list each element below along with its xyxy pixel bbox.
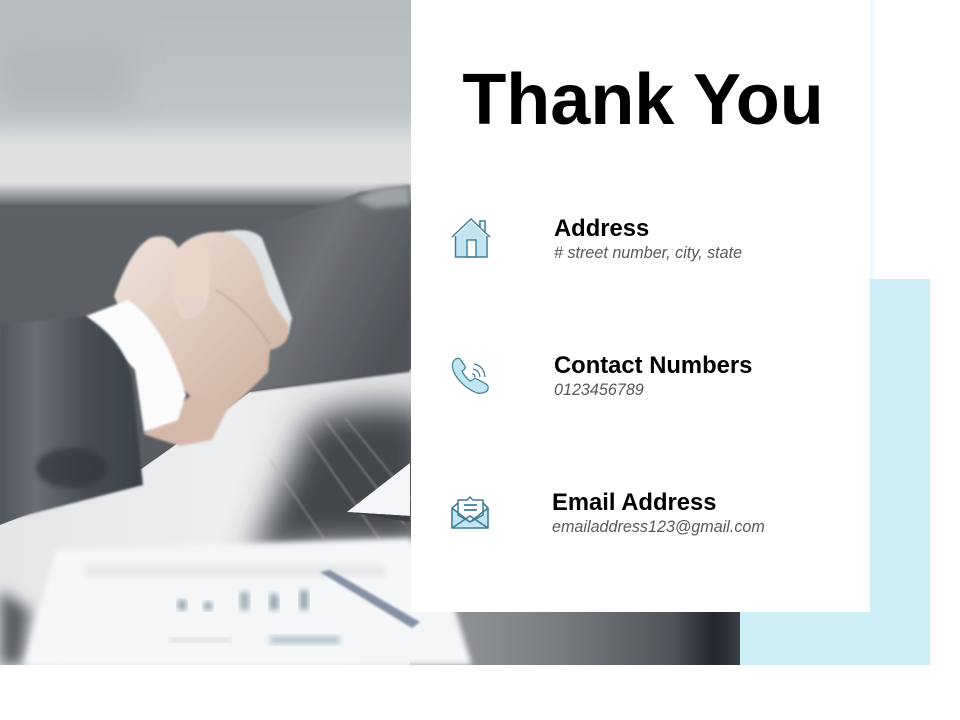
panel: white contact card xyxy=(411,0,870,612)
blurred document with chart xyxy=(24,538,472,665)
right sleeve xyxy=(240,185,410,392)
left sleeve xyxy=(0,316,143,522)
right shirt cuff xyxy=(224,230,292,335)
table surface xyxy=(0,368,740,665)
photo background xyxy=(0,0,740,665)
contact numbers heading: Contact Numbers xyxy=(554,352,752,379)
icon: phone xyxy=(452,358,489,394)
photo: business handshake xyxy=(0,0,740,665)
contact number detail: 0123456789 xyxy=(554,381,644,399)
panel: pale blue edge strip xyxy=(870,0,877,279)
icon: envelope xyxy=(451,496,489,529)
email detail: emailaddress123@gmail.com xyxy=(552,518,765,536)
panel: light blue accent block xyxy=(700,279,930,665)
icon: house xyxy=(452,218,490,258)
hands xyxy=(114,232,289,446)
address detail: # street number, city, state xyxy=(554,244,742,262)
left shirt cuff xyxy=(86,300,186,432)
title: Thank You xyxy=(462,60,824,140)
email heading: Email Address xyxy=(552,489,716,516)
right collar highlight xyxy=(355,185,410,208)
address heading: Address xyxy=(554,215,649,242)
